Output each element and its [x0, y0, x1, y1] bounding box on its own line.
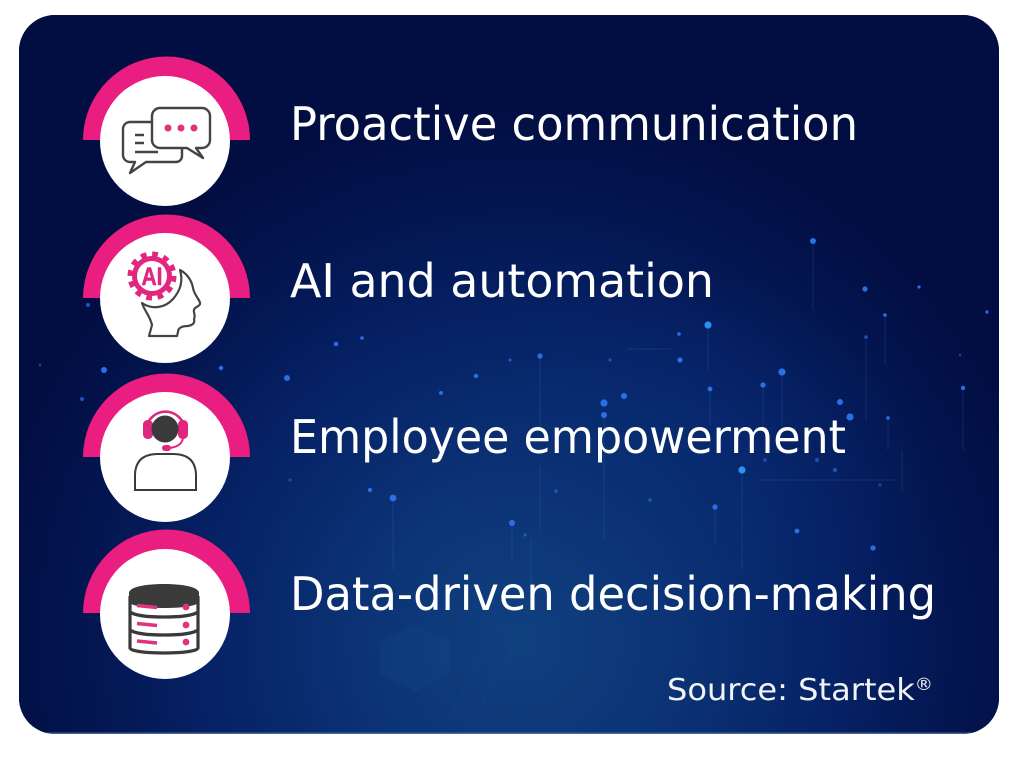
icon: database — [129, 584, 199, 653]
icon: head outline — [142, 270, 200, 336]
icon: gear with AI — [130, 254, 174, 298]
heading: data-driven decision-making: Data-driven decision-making — [290, 567, 936, 621]
icon group: employee empowerment — [83, 374, 250, 522]
icon: speech bubbles — [123, 108, 210, 173]
icon group: data-driven decision-making — [83, 530, 250, 679]
icon group: proactive communication — [83, 56, 250, 206]
heading: employee empowerment: Employee empowerment — [290, 410, 846, 464]
source note: ® — [915, 675, 933, 695]
heading: AI and automation: AI and automation — [290, 254, 714, 308]
heading: proactive communication: Proactive communication — [290, 97, 858, 151]
icon group: AI and automation — [83, 215, 250, 363]
icon: agent with headset — [135, 412, 196, 490]
source note: Source: Startek — [667, 673, 899, 708]
icon: gear with AI: AI — [142, 263, 162, 291]
